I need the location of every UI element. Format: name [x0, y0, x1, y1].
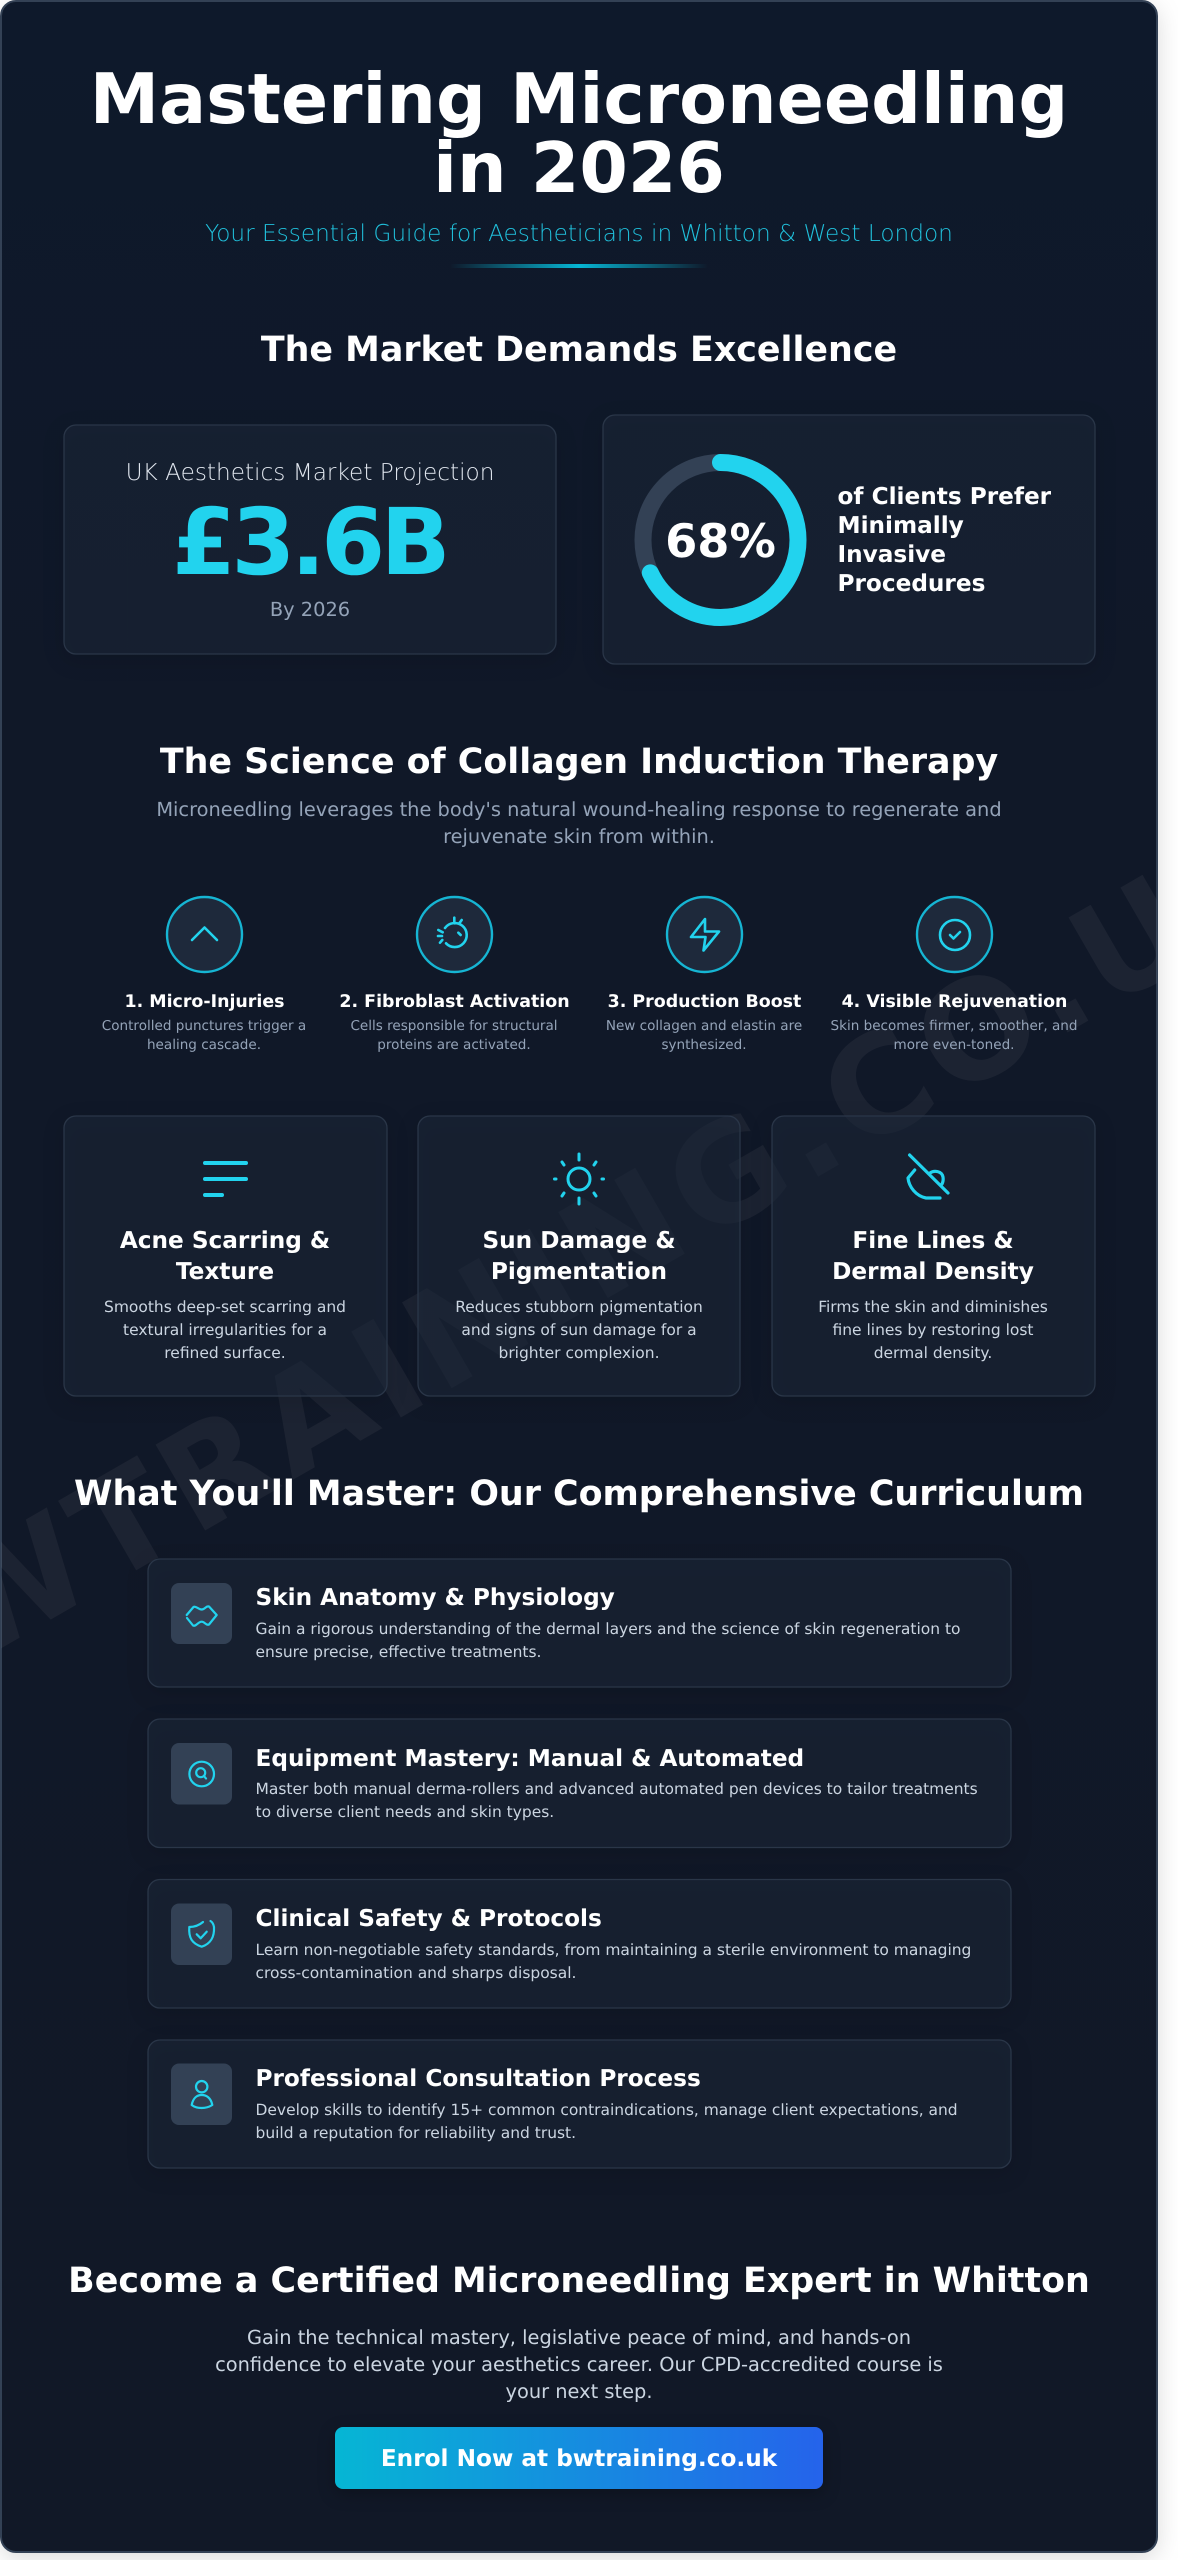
skin text: ensure precise, effective treatments.: [256, 1643, 541, 1661]
panel: fine lines: [772, 1116, 1095, 1396]
projection label: UK Aesthetics Market Projection: [126, 459, 494, 486]
step 4 text: Skin becomes firmer, smoother, and: [831, 1018, 1077, 1034]
donut chart 68%: [643, 462, 798, 618]
consultation title: Professional Consultation Process: [256, 2065, 701, 2092]
sun text: brighter complexion.: [498, 1344, 660, 1362]
panel: market projection: [64, 425, 556, 654]
heading: science: The Science of Collagen Induction Therapy: [160, 742, 998, 782]
step 2 title: 2. Fibroblast Activation: [339, 992, 570, 1012]
icon: shield check: [189, 1921, 214, 1947]
heading: call to action: Become a Certified Microneedling Expert in Whitton: [68, 2261, 1090, 2301]
icon: check circle: [940, 920, 970, 950]
icon tile: skin: [171, 1583, 232, 1644]
call to action text: your next step.: [506, 2380, 652, 2403]
fine lines text: dermal density.: [874, 1344, 992, 1362]
acne text: Smooths deep-set scarring and: [104, 1298, 346, 1316]
fine lines title: Fine Lines &: [852, 1227, 1014, 1254]
donut label: of Clients Prefer: [838, 483, 1052, 510]
equipment text: Master both manual derma-rollers and advanced automated pen devices to tailor treatments: [256, 1780, 978, 1798]
panel: equipment: [148, 1719, 1011, 1848]
panel: clinical safety: [148, 1880, 1011, 2008]
safety text: cross-contamination and sharps disposal.: [256, 1964, 576, 1982]
acne text: textural irregularities for a: [123, 1321, 327, 1339]
panel: acne scarring: [64, 1116, 387, 1396]
button: enrol: [335, 2427, 823, 2489]
heading: market: The Market Demands Excellence: [261, 330, 897, 370]
fine lines text: fine lines by restoring lost: [833, 1321, 1033, 1339]
heading: curriculum: What You'll Master: Our Comprehensive Curriculum: [74, 1474, 1084, 1514]
step 3: [606, 897, 802, 1053]
call to action text: confidence to elevate your aesthetics career. Our CPD-accredited course is: [215, 2353, 943, 2376]
step 3 text: synthesized.: [661, 1037, 747, 1053]
donut label: Invasive: [838, 541, 946, 568]
step 4 title: 4. Visible Rejuvenation: [842, 992, 1067, 1012]
acne text: refined surface.: [164, 1344, 286, 1362]
step 2 text: Cells responsible for structural: [350, 1018, 558, 1034]
safety title: Clinical Safety & Protocols: [256, 1905, 602, 1932]
step 2 text: proteins are activated.: [377, 1037, 531, 1053]
projection note: By 2026: [270, 598, 350, 621]
panel: consultation: [148, 2040, 1011, 2168]
step 1 text: healing cascade.: [147, 1037, 261, 1053]
donut value: 68%: [665, 514, 776, 568]
fine lines text: Firms the skin and diminishes: [818, 1298, 1048, 1316]
step 1: [102, 897, 306, 1053]
icon tile: safety: [171, 1904, 232, 1965]
fine lines title: Dermal Density: [832, 1258, 1034, 1285]
acne title: Texture: [176, 1258, 274, 1285]
step 3 text: New collagen and elastin are: [606, 1018, 802, 1034]
title: in 2026: [433, 128, 725, 209]
icon: eye off: [908, 1155, 948, 1198]
subtitle: Your Essential Guide for Aestheticians in Whitton & West London: [205, 220, 953, 247]
icon: chevron: [192, 928, 217, 940]
panel: sun damage: [418, 1116, 740, 1396]
science intro: rejuvenate skin from within.: [443, 825, 715, 848]
sun title: Pigmentation: [491, 1258, 667, 1285]
donut label: Minimally: [838, 512, 964, 539]
consultation text: build a reputation for reliability and trust.: [256, 2124, 576, 2142]
step 2: [339, 897, 570, 1053]
consultation text: Develop skills to identify 15+ common contraindications, manage client expectations, and: [256, 2101, 958, 2119]
title: Mastering Microneedling: [90, 59, 1068, 140]
icon: bolt: [691, 919, 719, 950]
panel: skin anatomy: [148, 1559, 1011, 1687]
divider glow: [450, 264, 708, 268]
sun text: Reduces stubborn pigmentation: [455, 1298, 703, 1316]
call to action text: Gain the technical mastery, legislative peace of mind, and hands-on: [247, 2326, 911, 2349]
step 1 text: Controlled punctures trigger a: [102, 1018, 306, 1034]
donut label: Procedures: [838, 570, 985, 597]
icon tile: equipment: [171, 1743, 232, 1804]
icon tile: consultation: [171, 2064, 232, 2125]
skin text: Gain a rigorous understanding of the dermal layers and the science of skin regeneration to: [256, 1620, 960, 1638]
header: [90, 59, 1068, 268]
button: enrol: Enrol Now at bwtraining.co.uk: [381, 2445, 778, 2472]
step 1 title: 1. Micro-Injuries: [125, 992, 284, 1012]
icon: lines: [205, 1163, 246, 1195]
icon: skin wave: [187, 1606, 217, 1626]
sun text: and signs of sun damage for a: [461, 1321, 697, 1339]
step 4 text: more even-toned.: [894, 1037, 1014, 1053]
icon: sun: [554, 1154, 604, 1204]
acne title: Acne Scarring &: [120, 1227, 330, 1254]
sun title: Sun Damage &: [482, 1227, 676, 1254]
science intro: Microneedling leverages the body's natural wound-healing response to regenerate and: [156, 798, 1002, 821]
step 4: [831, 897, 1077, 1053]
step 3 title: 3. Production Boost: [608, 992, 801, 1012]
icon: person: [192, 2081, 212, 2108]
projection value: £3.6B: [172, 489, 446, 596]
icon: search circle: [189, 1762, 214, 1786]
equipment text: to diverse client needs and skin types.: [256, 1803, 554, 1821]
icon: fibroblast: [438, 918, 467, 947]
skin title: Skin Anatomy & Physiology: [256, 1584, 615, 1611]
panel: client preference: [603, 415, 1095, 664]
equipment title: Equipment Mastery: Manual & Automated: [256, 1745, 804, 1772]
safety text: Learn non-negotiable safety standards, from maintaining a sterile environment to managing: [256, 1941, 971, 1959]
